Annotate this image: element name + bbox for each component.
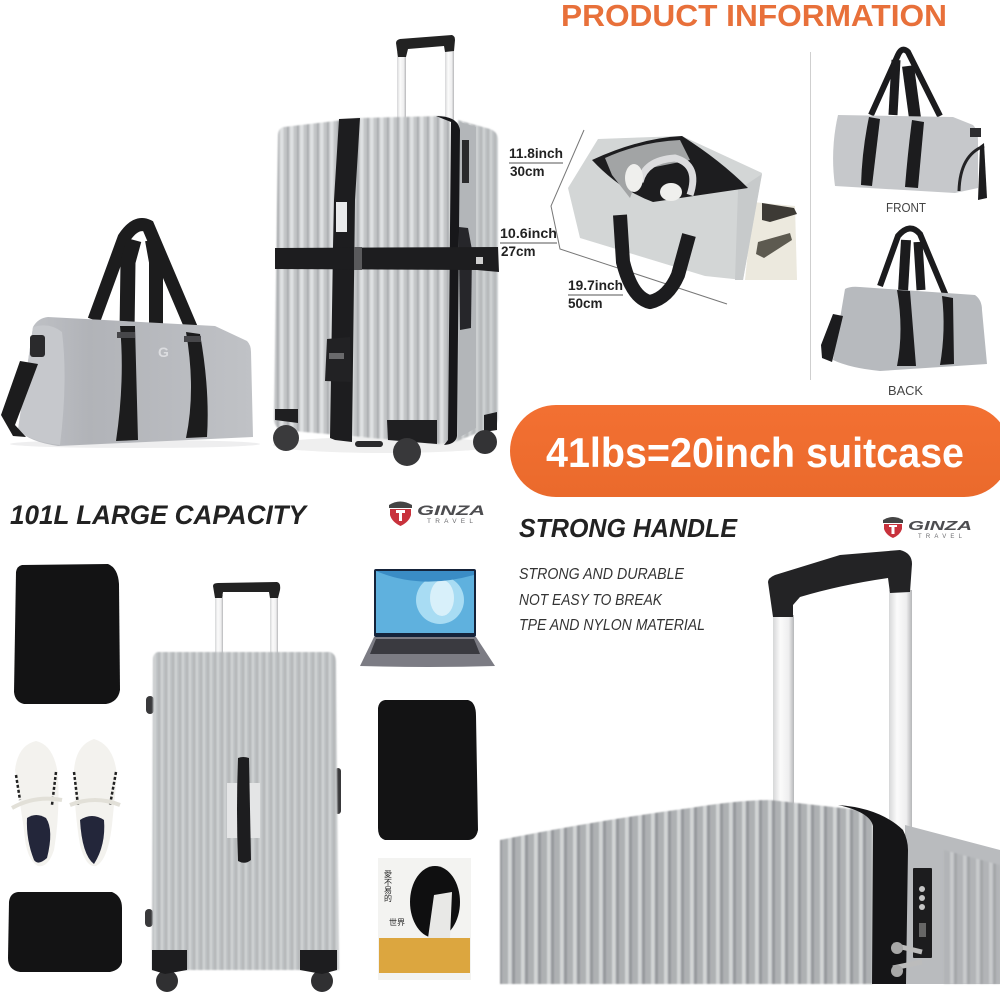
logo: Ginza Travel left: GINZA	[417, 502, 485, 518]
photo: black packing pouch large	[14, 564, 120, 704]
bag body	[568, 136, 762, 280]
dimension label: length: 50cm	[568, 296, 603, 311]
logo: Ginza Travel right: GINZA	[908, 518, 972, 533]
handle	[215, 595, 223, 655]
dimension label: depth: 10.6inch	[500, 226, 557, 241]
zip band	[436, 116, 460, 445]
photo: laptop	[360, 569, 495, 667]
bag body	[18, 317, 253, 446]
strap lock	[325, 337, 351, 382]
photo: book: 世界	[389, 917, 405, 927]
straps	[897, 290, 916, 366]
shoulder strap	[821, 314, 843, 362]
logo: Ginza Travel right: TRAVEL	[918, 534, 963, 540]
shell	[152, 652, 339, 970]
carry handles	[620, 215, 689, 302]
open compartment	[592, 136, 748, 202]
text block: handle features: NOT EASY TO BREAK	[519, 592, 663, 609]
photo: front view of bag	[833, 50, 987, 200]
dimension lines	[551, 130, 727, 304]
side panel	[455, 120, 498, 442]
zipper pulls	[893, 945, 922, 968]
banner: weight claim	[510, 405, 1000, 497]
side panel	[905, 825, 1000, 984]
straps	[861, 117, 880, 186]
logo: Ginza Travel left	[389, 502, 485, 526]
photo: suitcase close-up with handle	[500, 550, 1000, 984]
dimension label: height: 30cm	[510, 164, 545, 179]
front panel	[274, 116, 450, 444]
wheels	[156, 970, 178, 992]
side grip	[459, 227, 472, 330]
handles	[880, 228, 946, 296]
label: front: FRONT	[886, 200, 926, 215]
label: back: BACK	[888, 383, 923, 398]
heading: 101L large capacity: 101L LARGE CAPACITY	[10, 500, 309, 530]
bag handles	[94, 224, 193, 332]
side bumps	[146, 696, 154, 714]
shoes in side pocket	[745, 202, 797, 280]
text block: handle features	[519, 566, 705, 634]
photo: silver suitcase front view	[145, 582, 341, 992]
dimension label: length	[568, 278, 623, 311]
logo: Ginza Travel left: TRAVEL	[427, 518, 473, 525]
pocket opening	[959, 146, 984, 191]
dimension label: height: 11.8inch	[509, 146, 563, 161]
address tag	[336, 202, 347, 232]
dimension label: length: 19.7inch	[568, 278, 623, 293]
horizontal strap	[275, 247, 499, 272]
right sneaker	[70, 739, 120, 866]
dimension label: depth	[500, 226, 557, 259]
photo: silver suitcase with luggage straps	[273, 35, 499, 466]
wheels	[275, 409, 298, 423]
bag logo: G	[158, 344, 169, 360]
combination lock	[913, 868, 932, 958]
logo: Ginza Travel right	[883, 517, 972, 540]
handles	[871, 50, 940, 116]
central handle	[227, 783, 260, 838]
photo: black packing pouch medium	[378, 700, 478, 840]
vertical strap	[330, 118, 360, 442]
zip band	[838, 805, 908, 984]
photo: black packing pouch flat	[8, 892, 122, 972]
body	[833, 287, 987, 371]
text block: handle features: STRONG AND DURABLE	[519, 566, 684, 583]
photo: white sneakers	[12, 739, 120, 866]
handle poles	[773, 615, 794, 810]
heading: strong handle: STRONG HANDLE	[519, 513, 738, 543]
text block: handle features: TPE AND NYLON MATERIAL	[519, 617, 705, 634]
combination lock	[462, 140, 469, 183]
vertical webbing straps	[116, 326, 138, 441]
dimension label: height	[509, 146, 563, 179]
photo: book: 愛不易的	[384, 869, 392, 903]
banner: weight claim: 41lbs=20inch suitcase	[546, 429, 964, 476]
left sneaker	[12, 741, 62, 866]
photo: back view of bag	[821, 228, 987, 371]
shoulder strap and buckle	[1, 361, 38, 437]
body	[833, 115, 978, 193]
photo: book	[378, 858, 471, 980]
photo: grey duffel bag with shoulder strap	[1, 224, 260, 448]
telescopic handle	[397, 52, 406, 120]
dimension label: depth: 27cm	[501, 244, 536, 259]
handle grip	[768, 550, 912, 617]
front panel	[500, 800, 873, 984]
diagram: open duffel bag with dimensions	[551, 130, 797, 304]
headphones	[625, 158, 693, 201]
